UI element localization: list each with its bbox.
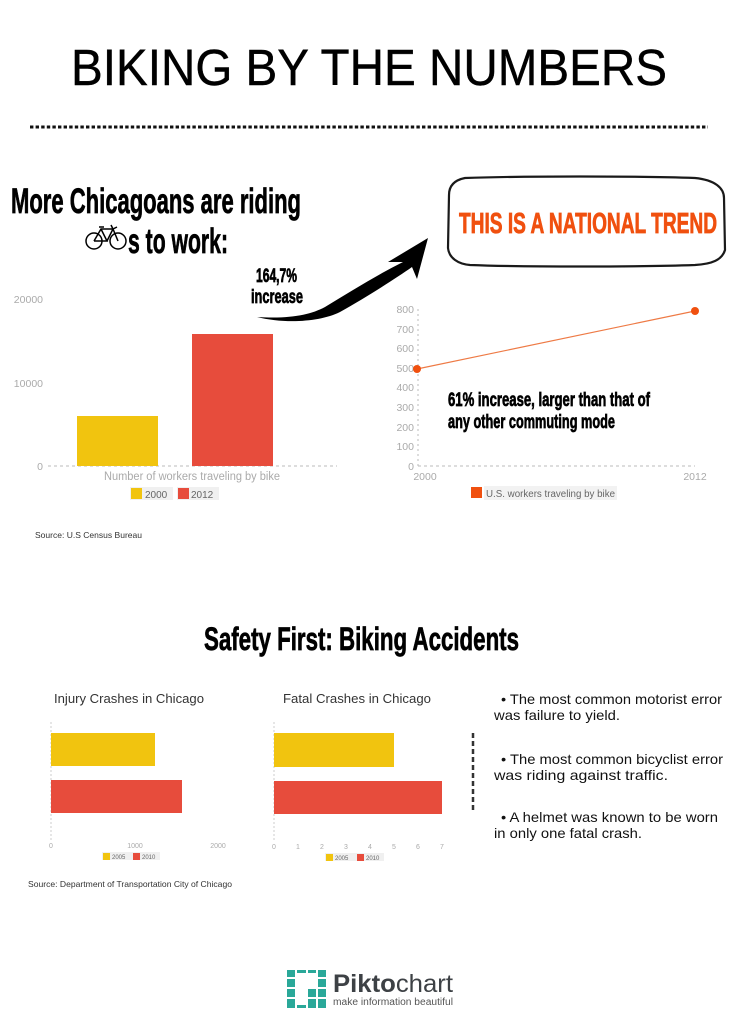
text block: safety facts: • The most common bicyclist error: [501, 751, 723, 767]
chart: fatal crashes: 5: [392, 844, 396, 851]
chart: injury crashes: 0: [49, 843, 53, 850]
legend: U.S. workers traveling by bike: [486, 489, 615, 500]
text block: safety facts: was failure to yield.: [493, 707, 620, 723]
legend: [102, 852, 160, 861]
chart: fatal crashes: 0: [272, 844, 276, 851]
chart: fatal crashes: 6: [416, 844, 420, 851]
chart: injury crashes: Injury Crashes in Chicago: [54, 691, 204, 706]
arrow: swoosh to national trend: [257, 238, 428, 321]
bar: 2012: [192, 334, 273, 466]
legend: 2005: [112, 855, 126, 861]
line chart: U.S. workers traveling by bike: 0: [408, 461, 414, 473]
source: department of transportation: Source: Department of Transportation City of Chicago: [28, 879, 232, 889]
bar chart: workers traveling by bike in Chicago: Number of workers traveling by bike: [104, 471, 280, 483]
callout box: this is a national trend: [448, 176, 725, 266]
heading: more Chicagoans: More Chicagoans are riding: [11, 182, 301, 221]
bar chart: workers traveling by bike in Chicago: 20000: [14, 294, 43, 306]
legend: 2005: [335, 856, 349, 862]
line chart: U.S. workers traveling by bike: 300: [396, 402, 414, 414]
bar: 2005: [51, 733, 155, 766]
bar: 2010: [274, 781, 442, 814]
line chart: U.S. workers traveling by bike: 700: [396, 324, 414, 336]
text block: safety facts: in only one fatal crash.: [494, 825, 642, 841]
line chart: U.S. workers traveling by bike: 100: [396, 441, 414, 453]
bar chart: workers traveling by bike in Chicago: 0: [37, 461, 43, 473]
line chart: U.S. workers traveling by bike: 2000: [413, 471, 437, 483]
text block: safety facts: • A helmet was known to be worn: [501, 809, 718, 825]
line chart: U.S. workers traveling by bike: 400: [396, 382, 414, 394]
legend: 2012: [191, 490, 214, 501]
legend: 2010: [366, 856, 380, 862]
note: 61% increase: 61% increase, larger than that of: [448, 390, 650, 411]
chart: fatal crashes: 2: [320, 844, 324, 851]
chart: fatal crashes: 3: [344, 844, 348, 851]
line chart: U.S. workers traveling by bike: 500: [396, 363, 414, 375]
heading: more Chicagoans: [11, 182, 301, 261]
chart: injury crashes: 1000: [127, 843, 143, 850]
logo: Piktochart: Piktochart: [333, 970, 453, 998]
logo: Piktochart: [287, 970, 453, 1008]
bar: 2005: [274, 733, 394, 767]
line chart: U.S. workers traveling by bike: 600: [396, 343, 414, 355]
icon: logo grid: [287, 970, 326, 1008]
line chart: U.S. workers traveling by bike: [396, 304, 707, 500]
logo: Piktochart: make information beautiful: [333, 997, 453, 1008]
text block: safety facts: [493, 691, 723, 841]
chart: fatal crashes: [272, 691, 444, 862]
chart: injury crashes: 2000: [210, 843, 226, 850]
note: 61% increase: any other commuting mode: [448, 412, 615, 433]
text block: safety facts: • The most common motorist error: [501, 691, 722, 707]
bar: 2000: [77, 416, 158, 466]
callout: 164,7% increase: increase: [251, 287, 303, 308]
bar: 2010: [51, 780, 182, 813]
heading: safety first: Safety First: Biking Accidents: [204, 621, 519, 657]
callout: 164,7% increase: [251, 266, 303, 308]
chart: fatal crashes: 4: [368, 844, 372, 851]
note: 61% increase: [448, 390, 650, 433]
chart: fatal crashes: Fatal Crashes in Chicago: [283, 691, 431, 706]
bar chart: workers traveling by bike in Chicago: 10000: [14, 378, 43, 390]
legend: [130, 487, 219, 501]
legend: 2010: [142, 855, 156, 861]
bar chart: workers traveling by bike in Chicago: [14, 294, 337, 501]
line chart: U.S. workers traveling by bike: 2012: [683, 471, 707, 483]
text block: safety facts: was riding against traffic.: [493, 767, 668, 783]
icon: bicycle: [86, 225, 126, 249]
chart: injury crashes: [49, 691, 226, 861]
line chart: U.S. workers traveling by bike: 800: [396, 304, 414, 316]
callout: 164,7% increase: 164,7%: [256, 266, 297, 287]
source: census: Source: U.S Census Bureau: [35, 530, 142, 540]
heading: more Chicagoans: s to work:: [128, 222, 228, 261]
legend: 2000: [145, 490, 168, 501]
title: BIKING BY THE NUMBERS: [71, 39, 667, 96]
chart: fatal crashes: 1: [296, 844, 300, 851]
line chart: U.S. workers traveling by bike: 200: [396, 422, 414, 434]
chart: fatal crashes: 7: [440, 844, 444, 851]
legend: [325, 853, 384, 862]
